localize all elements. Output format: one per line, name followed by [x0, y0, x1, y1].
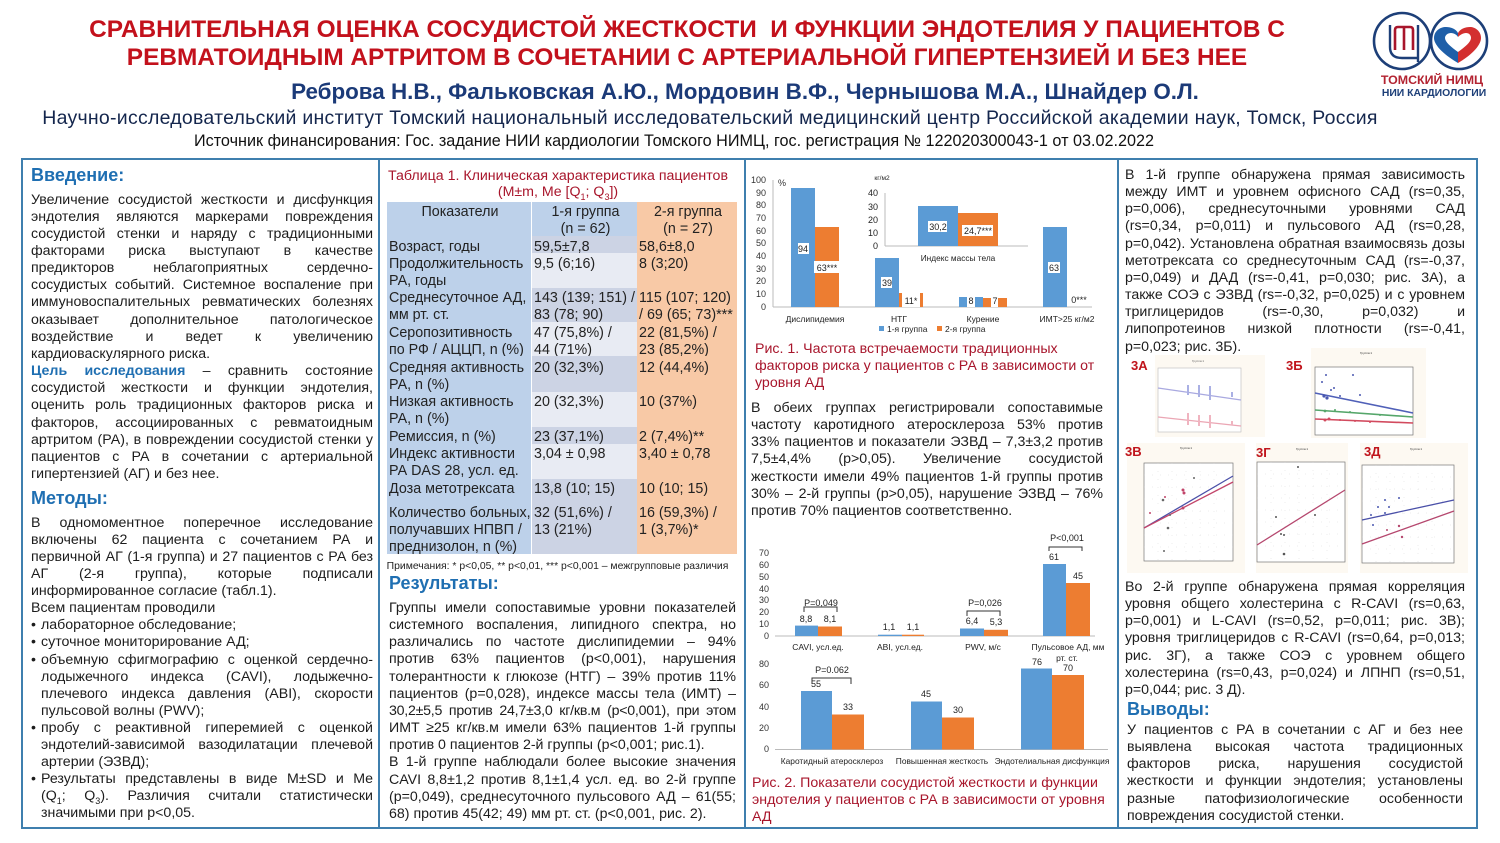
- inset chart: body mass index: 30,2: [929, 222, 947, 232]
- text: correlations group 1: триглицеридов (rs=-0,30, p=0,032) и: [1125, 304, 1465, 320]
- text: introduction: предикторов неблагоприятных сердечно-: [31, 260, 373, 276]
- chart 2a: stiffness indices: P<0,001: [1050, 533, 1084, 543]
- table: patient characteristics: 16 (59,3%) /: [639, 505, 717, 521]
- chart 2a: stiffness indices: 50: [759, 572, 769, 582]
- table: patient characteristics: (n = 62): [561, 221, 610, 237]
- table: patient characteristics: (n = 27): [663, 221, 713, 237]
- text: correlations group 1: p=0,006), среднесуточными уровнями САД: [1125, 201, 1465, 217]
- text: methods: пробу с реактивной гиперемией с оценкой: [41, 720, 373, 736]
- text: conclusions: повреждения сосудистой стенки.: [1127, 808, 1344, 824]
- table: patient characteristics: 1-я группа: [551, 204, 620, 220]
- text: methods: эндотелий-зависимой вазодилатации плечевой: [41, 737, 373, 753]
- table title: (M±m, Me [Q1; Q3]): [498, 184, 618, 201]
- chart 2b: vascular disorders: 60: [759, 680, 769, 690]
- text: methods: В одномоментное поперечное исследование: [31, 515, 373, 531]
- text: results: системного воспаления, липидного спектра, но: [389, 617, 736, 633]
- text: introduction: [31, 192, 373, 482]
- chart 1: risk factors: 94: [798, 244, 808, 254]
- chart 1: risk factors: 11*: [905, 296, 918, 306]
- chart 1: risk factors: 63: [1049, 263, 1059, 273]
- text: correlations group 2: рис. 3Г), а также СОЭ с уровнем общего: [1125, 648, 1465, 664]
- table: patient characteristics: Продолжительность: [389, 256, 523, 272]
- text: correlations group 2: холестерина (rs=0,43, p=0,024) и ЛПНП (rs=0,51,: [1125, 665, 1465, 681]
- label 3C: 3В: [1125, 444, 1142, 459]
- table: patient characteristics: 83 (78; 90): [534, 307, 603, 323]
- inset chart: body mass index: Индекс массы тела: [921, 253, 996, 263]
- table: patient characteristics: 8 (3;20): [639, 256, 688, 272]
- table: patient characteristics: Серопозитивность: [389, 325, 512, 341]
- table: patient characteristics: 22 (81,5%) /: [639, 325, 717, 341]
- text: correlations group 1: между ИМТ и уровнем офисного САД (rs=0,35,: [1125, 184, 1465, 200]
- table: patient characteristics: 20 (32,3%): [534, 394, 604, 410]
- chart 1: risk factors: 1-я группа: [887, 324, 928, 334]
- table: patient characteristics: 115 (107; 120): [639, 290, 731, 306]
- caption: figure 1: уровня АД: [755, 375, 824, 391]
- table: patient characteristics: мм рт. ст.: [389, 307, 449, 323]
- plot 3E: Группа:1: [1410, 447, 1422, 451]
- text: carotid and stiffness: [751, 400, 1103, 519]
- text: results: Группы имели сопоставимые уровни показателей: [389, 600, 736, 616]
- chart 1: risk factors: %: [778, 178, 786, 188]
- text: correlations group 2: уровня общего холестерина с R-CAVI (rs=0,63,: [1125, 596, 1465, 612]
- text: introduction: сосудистых событий. Системное воспаление при: [31, 277, 373, 293]
- chart 2b: vascular disorders: 76: [1032, 657, 1042, 667]
- chart 1: risk factors: 7: [992, 296, 998, 306]
- table: patient characteristics: 2-я группа: [654, 204, 722, 220]
- title: СРАВНИТЕЛЬНАЯ ОЦЕНКА СОСУДИСТОЙ ЖЕСТКОСТИ И ФУНКЦИИ ЭНДОТЕЛИЯ У ПАЦИЕНТОВ С: [89, 16, 1285, 43]
- text: methods: суточное мониторирование АД;: [41, 634, 250, 650]
- scatter plots: figure 3: [1125, 348, 1468, 573]
- chart 2a: stiffness indices: P=0,049: [804, 598, 838, 608]
- text: introduction: оценить роль традиционных факторов риска и: [31, 397, 373, 413]
- affiliation: Научно-исследовательский институт Томский национальный исследовательский медицинский центр Российской академии наук, Томск, Россия: [42, 107, 1378, 129]
- table: patient characteristics: 13,8 (10; 15): [534, 481, 615, 497]
- chart 1: risk factors: Курение: [967, 314, 1000, 324]
- text: correlations group 1: (rs=0,34, p=0,011) и пульсового АД (rs=0,28,: [1125, 218, 1465, 234]
- text: correlations group 1: [1125, 167, 1465, 355]
- chart 1: risk factors: НТГ: [891, 314, 907, 324]
- chart 2a: stiffness indices: 30: [759, 595, 769, 605]
- inset chart: body mass index: 40: [868, 188, 878, 198]
- text: methods: плечевого индекса давления (ABI), скорости: [41, 686, 373, 702]
- text: conclusions: выявлена высокая частота традиционных: [1127, 739, 1463, 755]
- text: correlations group 2: уровня триглицеридов с R-CAVI (rs=0,64, p=0,013;: [1125, 630, 1465, 646]
- chart 1: risk factors: 63***: [817, 263, 838, 273]
- text: methods: Результаты представлены в виде M±SD и Me: [41, 771, 373, 787]
- caption: figure 1: [755, 341, 1094, 391]
- table: patient characteristics: Индекс активности: [389, 446, 515, 462]
- table: patient characteristics: 13 (21%): [534, 522, 592, 538]
- heading: methods: Методы:: [31, 488, 108, 508]
- chart 2a: stiffness indices: 40: [759, 584, 769, 594]
- text: methods: включены 62 пациента с сочетанием РА и: [31, 532, 373, 548]
- chart 2a: stiffness indices: 6,4: [966, 616, 978, 626]
- table: patient characteristics: РА DAS 28, усл. ед.: [389, 463, 519, 479]
- table: patient characteristics: 3,04 ± 0,98: [534, 446, 605, 462]
- text: carotid and stiffness: 7,5±4,4% (p>0,05). Увеличение сосудистой: [751, 451, 1103, 467]
- chart 2a: stiffness indices: 5,3: [990, 617, 1002, 627]
- chart 2a: stiffness indices: 1,1: [907, 622, 919, 632]
- table: patient characteristics: 9,5 (6;16): [534, 256, 595, 272]
- chart 2b: vascular disorders: 30: [953, 705, 963, 715]
- title: [89, 15, 1285, 71]
- chart 2b: vascular disorders: 45: [921, 689, 931, 699]
- chart 1: risk factors: Дислипидемия: [786, 314, 845, 324]
- text: results: [389, 600, 736, 822]
- chart 2b: vascular disorders: 33: [843, 702, 853, 712]
- table: patient characteristics: Средняя активность: [389, 360, 524, 376]
- text: introduction: гипертензией (АГ) и без нее.: [31, 466, 219, 482]
- inset chart: body mass index: 24,7***: [964, 226, 993, 236]
- text: methods: артерии (ЭЗВД);: [41, 754, 149, 770]
- text: conclusions: факторов риска, нарушения сосудистой: [1127, 756, 1463, 772]
- caption: figure 1: факторов риска у пациентов с РА в зависимости от: [755, 358, 1094, 374]
- plot 3B: [1286, 348, 1426, 438]
- table: patient characteristics: Среднесуточное АД,: [389, 290, 526, 306]
- chart 1: risk factors: 70: [756, 213, 766, 223]
- table title: Таблица 1. Клиническая характеристика пациентов: [388, 168, 728, 184]
- text: results: В 1-й группе наблюдали более высокие значения: [389, 754, 736, 770]
- table: patient characteristics: [387, 202, 737, 555]
- chart 2b: vascular disorders: 0: [764, 744, 769, 754]
- table: patient characteristics: 12 (44,4%): [639, 360, 709, 376]
- text: correlations group 1: липопротеинов низкой плотности (rs=-0,41,: [1125, 321, 1465, 337]
- text: methods: лабораторное обследование;: [41, 617, 236, 633]
- table: patient characteristics: по РФ / АЦЦП, n (%): [389, 342, 524, 358]
- heading: results: Результаты:: [389, 573, 499, 593]
- table: patient characteristics: 3,40 ± 0,78: [639, 446, 710, 462]
- table: patient characteristics: РА, n (%): [389, 411, 449, 427]
- text: results: (p=0,049), среднесуточного пульсового АД – 61(55;: [389, 789, 736, 805]
- chart 1: risk factors: 20: [756, 276, 766, 286]
- text: conclusions: разные патофизиологические особенности: [1127, 791, 1463, 807]
- text: methods: АГ (2-я группа), которые подписали: [31, 566, 373, 582]
- chart 2b: vascular disorders: 55: [811, 679, 821, 689]
- label 3A: 3А: [1131, 358, 1148, 373]
- table: patient characteristics: / 69 (65; 73)***: [639, 307, 733, 323]
- panels frame: [21, 158, 1478, 829]
- chart 2a: stiffness indices: P=0,026: [968, 598, 1002, 608]
- table: patient characteristics: РА, n (%): [389, 377, 449, 393]
- table: patient characteristics: 23 (37,1%): [534, 429, 604, 445]
- authors: Реброва Н.В., Фальковская А.Ю., Мордовин В.Ф., Чернышова М.А., Шнайдер О.Л.: [291, 79, 1199, 104]
- text: introduction: пациентов с РА в сочетании с артериальной: [31, 449, 373, 465]
- text: results: 68) против 45(42; 49) мм рт. ст. (p<0,001, рис. 2).: [389, 806, 706, 822]
- text: introduction: Цель исследования – сравнить состояние: [31, 363, 373, 379]
- chart 2b: vascular disorders: [759, 657, 1109, 766]
- text: introduction: факторов, ассоциированных с ревматоидным: [31, 415, 373, 431]
- logo: ТОМСКИЙ НИМЦ: [1381, 72, 1483, 87]
- chart 1: risk factors: 60: [756, 226, 766, 236]
- text: conclusions: У пациентов с РА в сочетании с АГ и без нее: [1127, 722, 1463, 738]
- plot 3C: [1125, 443, 1245, 573]
- text: introduction: факторами риска выступают в качестве: [31, 243, 373, 259]
- text: results: ИМТ ≥25 кг/кв.м имели 63% пациентов 1-й группы: [389, 720, 736, 736]
- chart 1: risk factors: 8: [968, 296, 974, 306]
- text: correlations group 2: p=0,001) и L-CAVI (rs=0,52, p=0,011; рис. 3В);: [1125, 613, 1465, 629]
- plot 3C: Группа:1: [1180, 446, 1192, 450]
- table: patient characteristics: Ремиссия, n (%): [389, 429, 496, 445]
- chart 1: risk factors: 0***: [1071, 295, 1087, 305]
- text: carotid and stiffness: В обеих группах регистрировали сопоставимые: [751, 400, 1103, 416]
- table: patient characteristics: 59,5±7,8: [534, 239, 590, 255]
- text: results: пациентов (p=0,028), индексе массы тела (ИМТ) –: [389, 686, 736, 702]
- table: patient characteristics: 32 (51,6%) /: [534, 505, 612, 521]
- text: correlations group 2: [1125, 579, 1465, 698]
- heading: conclusions: Выводы:: [1127, 699, 1210, 719]
- logo: [1372, 12, 1488, 99]
- chart 2a: stiffness indices: ABI, усл.ед.: [877, 642, 923, 652]
- chart 2a: stiffness indices: 8,1: [824, 614, 836, 624]
- text: methods: первичной АГ (1-я группа) и 27 пациентов с РА без: [31, 549, 373, 565]
- text: correlations group 1: p=0,023; рис. 3Б).: [1125, 339, 1241, 355]
- text: introduction: сосудистой жесткости и функции эндотелия,: [31, 380, 373, 396]
- text: correlations group 2: p=0,044; рис. 3 Д).: [1125, 682, 1245, 698]
- chart 1: risk factors: 30: [756, 264, 766, 274]
- inset chart: body mass index: кг/м2: [874, 175, 890, 182]
- text: methods: [31, 515, 373, 821]
- table: patient characteristics: 23 (85,2%): [639, 342, 709, 358]
- text: results: 30,2±5,5 против 24,7±3,0 кг/кв.м (p<0,001), при этом: [389, 703, 736, 719]
- chart 1: risk factors: [751, 175, 1095, 334]
- chart 2b: vascular disorders: 20: [759, 723, 769, 733]
- chart 1: risk factors: 90: [756, 188, 766, 198]
- text: introduction: кардиоваскулярного риска.: [31, 346, 210, 362]
- chart 2a: stiffness indices: 70: [759, 548, 769, 558]
- text: carotid and stiffness: жесткости имели 49% пациентов 1-й группы против: [751, 469, 1103, 485]
- text: methods: информированное согласие (табл.1).: [31, 583, 277, 599]
- text: introduction: эндотелия являются маркерами повреждения: [31, 209, 373, 225]
- label 3E: 3Д: [1364, 444, 1381, 459]
- table: patient characteristics: 1 (3,7%)*: [639, 522, 699, 538]
- caption: figure 2: АД: [752, 809, 772, 825]
- caption: figure 2: эндотелия у пациентов с РА в зависимости от уровня: [752, 792, 1105, 808]
- logo: НИИ КАРДИОЛОГИИ: [1382, 88, 1486, 99]
- text: results: толерантности к глюкозе (НТГ) – 39% против 11%: [389, 669, 736, 685]
- chart 1: risk factors: 39: [882, 278, 892, 288]
- text: results: различались по частоте дислипидемии – 94%: [389, 634, 736, 650]
- table: patient characteristics: 10 (37%): [639, 394, 697, 410]
- plot 3D: Группа:1: [1296, 447, 1308, 451]
- funding source: Источник финансирования: Гос. задание НИИ кардиологии Томского НИМЦ, гос. регистрация № 122020300043-1 от 03.02.2022: [194, 132, 1154, 150]
- chart 1: risk factors: 2-я группа: [945, 324, 986, 334]
- chart 2b: vascular disorders: Повышенная жесткость: [896, 756, 989, 766]
- inset chart: body mass index: 10: [868, 228, 878, 238]
- inset chart: body mass index: 0: [873, 241, 878, 251]
- table: patient characteristics: Количество больных,: [389, 505, 531, 521]
- chart 2b: vascular disorders: 80: [759, 659, 769, 669]
- chart 2a: stiffness indices: рт. ст.: [1056, 653, 1078, 663]
- chart 1: risk factors: 80: [756, 200, 766, 210]
- table: patient characteristics: получавших НПВП /: [389, 522, 522, 538]
- chart 1: risk factors: 10: [756, 289, 766, 299]
- chart 2a: stiffness indices: 1,1: [883, 622, 895, 632]
- chart 2a: stiffness indices: 8,8: [800, 614, 812, 624]
- chart 2a: stiffness indices: 45: [1073, 571, 1083, 581]
- plot 3D: [1256, 443, 1348, 573]
- table: patient characteristics: Доза метотрексата: [389, 481, 514, 497]
- table: patient characteristics: 47 (75,8%) /: [534, 325, 612, 341]
- chart 2b: vascular disorders: Каротидный атеросклероз: [781, 756, 883, 766]
- table: patient characteristics: РА, годы: [389, 273, 446, 289]
- label 3B: 3Б: [1286, 358, 1303, 373]
- text: introduction: сосудистой стенки и наряду с традиционными: [31, 226, 373, 242]
- text: correlations group 1: В 1-й группе обнаружена прямая зависимость: [1125, 167, 1465, 183]
- text: methods: Всем пациентам проводили: [31, 600, 215, 616]
- chart 2a: stiffness indices: 0: [764, 631, 769, 641]
- table title: [388, 168, 728, 201]
- chart 2b: vascular disorders: 40: [759, 702, 769, 712]
- text: results: против 63% пациентов (p<0,001), нарушения: [389, 651, 736, 667]
- table: patient characteristics: 44 (71%): [534, 342, 592, 358]
- table notes: Примечания: * p<0,05, ** p<0,01, *** p<0,001 – межгрупповые различия: [387, 561, 728, 572]
- chart 2b: vascular disorders: P=0.062: [815, 665, 849, 675]
- text: carotid and stiffness: 33% пациентов и показатели ЭЗВД – 7,3±3,2 против: [751, 434, 1103, 450]
- chart 1: risk factors: 0: [761, 302, 766, 312]
- title: РЕВМАТОИДНЫМ АРТРИТОМ В СОЧЕТАНИИ С АРТЕРИАЛЬНОЙ ГИПЕРТЕНЗИЕЙ И БЕЗ НЕЕ: [127, 44, 1247, 71]
- chart 1: risk factors: 100: [751, 175, 766, 185]
- text: methods: пульсовой волны (PWV);: [41, 703, 204, 719]
- heading: introduction: Введение:: [31, 165, 124, 185]
- table: patient characteristics: Возраст, годы: [389, 239, 480, 255]
- text: conclusions: [1127, 722, 1463, 824]
- text: conclusions: жесткости и функции эндотелия; установлены: [1127, 773, 1463, 789]
- inset chart: body mass index: 20: [868, 215, 878, 225]
- text: correlations group 1: p=0,049) и ДАД (rs=-0,41, p=0,030; рис. 3А), а: [1125, 270, 1465, 286]
- table: patient characteristics: преднизолон, n (%): [389, 539, 517, 555]
- text: introduction: Увеличение сосудистой жесткости и дисфункция: [31, 192, 373, 208]
- text: introduction: иммуновоспалительных ревматических болезнях: [31, 294, 373, 310]
- label 3D: 3Г: [1256, 445, 1271, 460]
- chart 1: risk factors: 50: [756, 238, 766, 248]
- chart 2a: stiffness indices: 60: [759, 560, 769, 570]
- chart 1: risk factors: ИМТ>25 кг/м2: [1040, 314, 1095, 324]
- inset chart: body mass index: 30: [868, 202, 878, 212]
- text: results: против 0 пациентов 2-й группы (p<0,001; рис.1).: [389, 737, 705, 753]
- text: introduction: оказывает дополнительное патологическое: [31, 312, 373, 328]
- text: correlations group 1: p=0,042). Установлена обратная взаимосвязь дозы: [1125, 236, 1465, 252]
- caption: figure 1: Рис. 1. Частота встречаемости традиционных: [755, 341, 1058, 357]
- plot 3E: [1360, 443, 1468, 573]
- chart 1: risk factors: 40: [756, 251, 766, 261]
- inset chart: body mass index: [868, 175, 1028, 263]
- chart 2a: stiffness indices: CAVI, усл.ед.: [792, 642, 844, 652]
- chart 2a: stiffness indices: [759, 533, 1105, 663]
- text: methods: объемную сфигмографию с оценкой сердечно-: [41, 652, 373, 668]
- table: patient characteristics: Показатели: [422, 204, 498, 220]
- text: correlations group 2: Во 2-й группе обнаружена прямая корреляция: [1125, 579, 1465, 595]
- text: carotid and stiffness: 30% – 2-й группы (p>0,05), нарушение ЭЗВД – 76%: [751, 486, 1103, 502]
- plot 3A: Группа:1: [1192, 359, 1204, 363]
- chart 2b: vascular disorders: Эндотелиальная дисфункция: [995, 756, 1109, 766]
- text: carotid and stiffness: частоту каротидного атеросклероза 53% против: [751, 417, 1103, 433]
- table: patient characteristics: 10 (10; 15): [639, 481, 708, 497]
- plot 3A: [1131, 355, 1265, 437]
- plot 3B: Группа:1: [1360, 351, 1372, 355]
- text: correlations group 1: метотрексата со среднесуточным САД (rs=-0,37,: [1125, 253, 1465, 269]
- text: carotid and stiffness: против 70% пациентов соответственно.: [751, 503, 1012, 519]
- chart 2a: stiffness indices: Пульсовое АД, мм: [1032, 642, 1105, 652]
- chart 2a: stiffness indices: PWV, м/с: [965, 642, 1002, 652]
- table: patient characteristics: 58,6±8,0: [639, 239, 695, 255]
- text: introduction: артритом (РА), в повреждении сосудистой стенки у: [31, 432, 373, 448]
- table: patient characteristics: Низкая активность: [389, 394, 514, 410]
- text: methods: значимыми при p<0,05.: [41, 805, 195, 821]
- text: methods: лодыжечного индекса (CAVI), лодыжечно-: [41, 669, 373, 685]
- caption: figure 2: [752, 775, 1105, 825]
- text: correlations group 1: также СОЭ с ЭЗВД (rs=-0,32, p=0,025) и с уровнем: [1125, 287, 1465, 303]
- chart 2a: stiffness indices: 61: [1049, 552, 1059, 562]
- table: patient characteristics: 20 (32,3%): [534, 360, 604, 376]
- chart 2a: stiffness indices: 10: [759, 619, 769, 629]
- text: results: CAVI 8,8±1,2 против 8,1±1,4 усл. ед. во 2-й группе: [389, 772, 736, 788]
- caption: figure 2: Рис. 2. Показатели сосудистой жесткости и функции: [752, 775, 1098, 791]
- text: introduction: воздействие и ведет к увеличению: [31, 329, 373, 345]
- text: methods: (Q1; Q3). Различия считали статистически: [41, 788, 373, 806]
- chart 2a: stiffness indices: 20: [759, 607, 769, 617]
- table: patient characteristics: 143 (139; 151) /: [534, 290, 635, 306]
- table: patient characteristics: 2 (7,4%)**: [639, 429, 704, 445]
- chart 2b: vascular disorders: 70: [1063, 663, 1073, 673]
